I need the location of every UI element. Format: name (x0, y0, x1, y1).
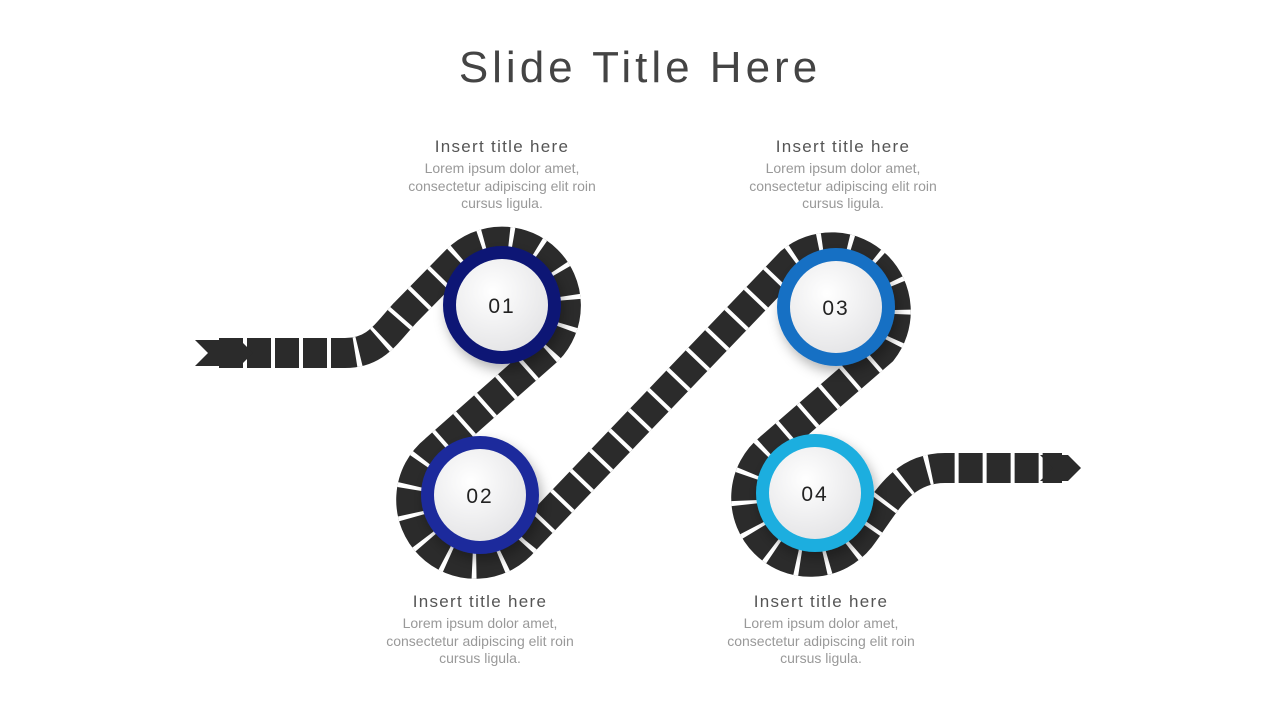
text block 04 (727, 592, 915, 666)
text block 01: Insert title here (435, 137, 569, 156)
text block 04: Insert title here (754, 592, 888, 611)
text block 02 (386, 592, 574, 666)
circle 04 (756, 434, 874, 552)
text block 01 (408, 137, 596, 211)
text block 04: cursus ligula. (780, 650, 862, 666)
circle 03 (777, 248, 895, 366)
text block 03: cursus ligula. (802, 195, 884, 211)
text block 01: consectetur adipiscing elit roin (408, 178, 596, 194)
text block 04: Lorem ipsum dolor amet, (744, 615, 898, 631)
text block 03: Lorem ipsum dolor amet, (766, 160, 920, 176)
text block 02: Insert title here (413, 592, 547, 611)
text block 02: consectetur adipiscing elit roin (386, 632, 574, 648)
title: Slide Title Here (459, 43, 821, 92)
text block 02: Lorem ipsum dolor amet, (403, 615, 557, 631)
circle 03: 03 (822, 297, 850, 320)
circle 02 (421, 436, 539, 554)
text block 01: Lorem ipsum dolor amet, (425, 160, 579, 176)
circle 02: 02 (466, 485, 494, 508)
circle 01: 01 (488, 295, 516, 318)
text block 03: consectetur adipiscing elit roin (749, 178, 937, 194)
text block 04: consectetur adipiscing elit roin (727, 632, 915, 648)
text block 02: cursus ligula. (439, 650, 521, 666)
text block 03 (749, 137, 937, 211)
text block 03: Insert title here (776, 137, 910, 156)
road path (195, 242, 1081, 564)
circle 01 (443, 246, 561, 364)
circle 04: 04 (801, 483, 829, 506)
text block 01: cursus ligula. (461, 195, 543, 211)
